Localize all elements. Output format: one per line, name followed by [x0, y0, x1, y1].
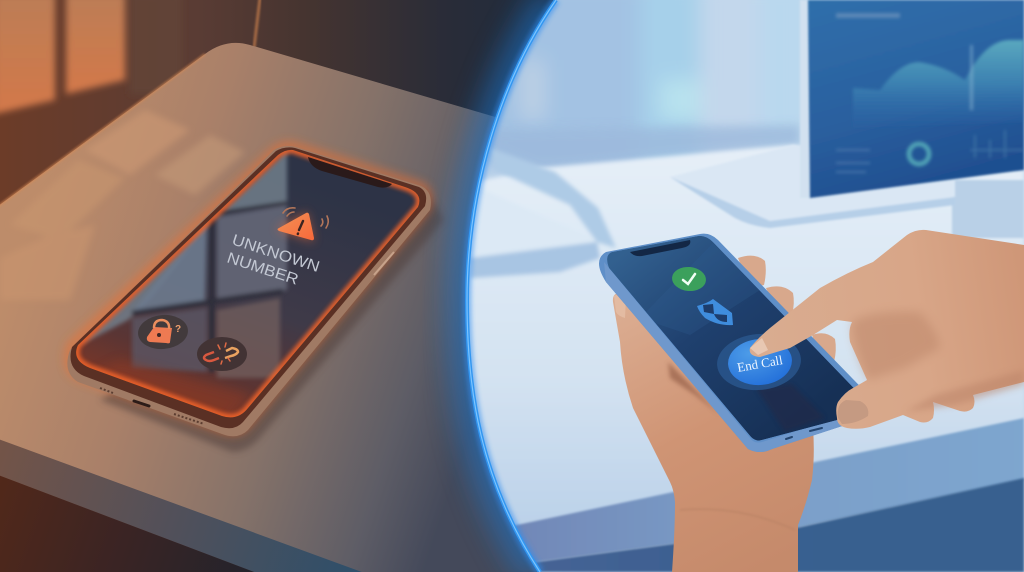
side button — [374, 252, 394, 275]
lower red tint — [110, 360, 246, 412]
notch — [308, 157, 392, 188]
label: unknown number: NUMBER — [225, 250, 300, 289]
monitor stand and base — [670, 0, 1024, 238]
notch — [630, 240, 690, 256]
table front edge — [0, 436, 370, 572]
phone: end call — [599, 234, 885, 452]
screen — [607, 236, 875, 441]
pointing hand — [750, 230, 1024, 429]
icon: warning triangle — [276, 208, 328, 242]
phone: unknown number — [67, 146, 431, 436]
wrist crease — [680, 509, 795, 530]
icon: padlock with question mark — [138, 315, 188, 349]
index nail — [750, 338, 768, 355]
table lit edge — [0, 54, 205, 212]
dark under table — [0, 472, 262, 572]
palm shading — [905, 370, 1024, 412]
desk front — [516, 417, 1024, 562]
icon: broken chain link — [197, 337, 247, 371]
desk surface — [469, 143, 1024, 422]
screen — [76, 150, 419, 425]
window reflection on screen — [80, 150, 287, 378]
sunlit window — [0, 0, 130, 117]
table surface — [0, 43, 560, 572]
icon: padlock with question mark: ? — [175, 324, 181, 335]
phone body — [599, 234, 885, 452]
button: end call — [715, 330, 803, 394]
desk lower dark band — [536, 477, 1024, 572]
holding hand — [613, 256, 836, 572]
label: unknown number — [227, 234, 320, 284]
fingers behind phone — [738, 256, 766, 288]
chair edge — [254, 0, 260, 48]
label: unknown number: UNKNOWN — [230, 232, 322, 276]
screen edge glow — [76, 150, 419, 417]
curled finger shading — [852, 312, 940, 380]
window light on table — [0, 110, 245, 300]
button: end call: End Call — [736, 352, 784, 375]
divider: glowing arc — [467, 0, 556, 572]
wall lower shadow — [490, 125, 800, 170]
phone cast shadow — [100, 190, 444, 452]
panel: left danger scene — [0, 0, 560, 572]
phone body — [67, 146, 431, 436]
icon: green check — [671, 266, 707, 292]
blurred wall colours — [470, 0, 808, 170]
thumb nail — [838, 400, 868, 424]
icon: shield — [697, 299, 733, 325]
blurred object on desk — [470, 148, 616, 278]
divider glow on dark side — [467, 0, 556, 572]
phone glow — [69, 146, 428, 430]
thumb nail — [614, 294, 626, 318]
charging port — [134, 401, 149, 406]
monitor with chart — [808, 0, 1024, 198]
palm shadow under phone — [666, 362, 714, 410]
panel: right safe scene — [460, 0, 1024, 572]
charging port — [786, 428, 822, 439]
speaker holes — [100, 388, 204, 424]
